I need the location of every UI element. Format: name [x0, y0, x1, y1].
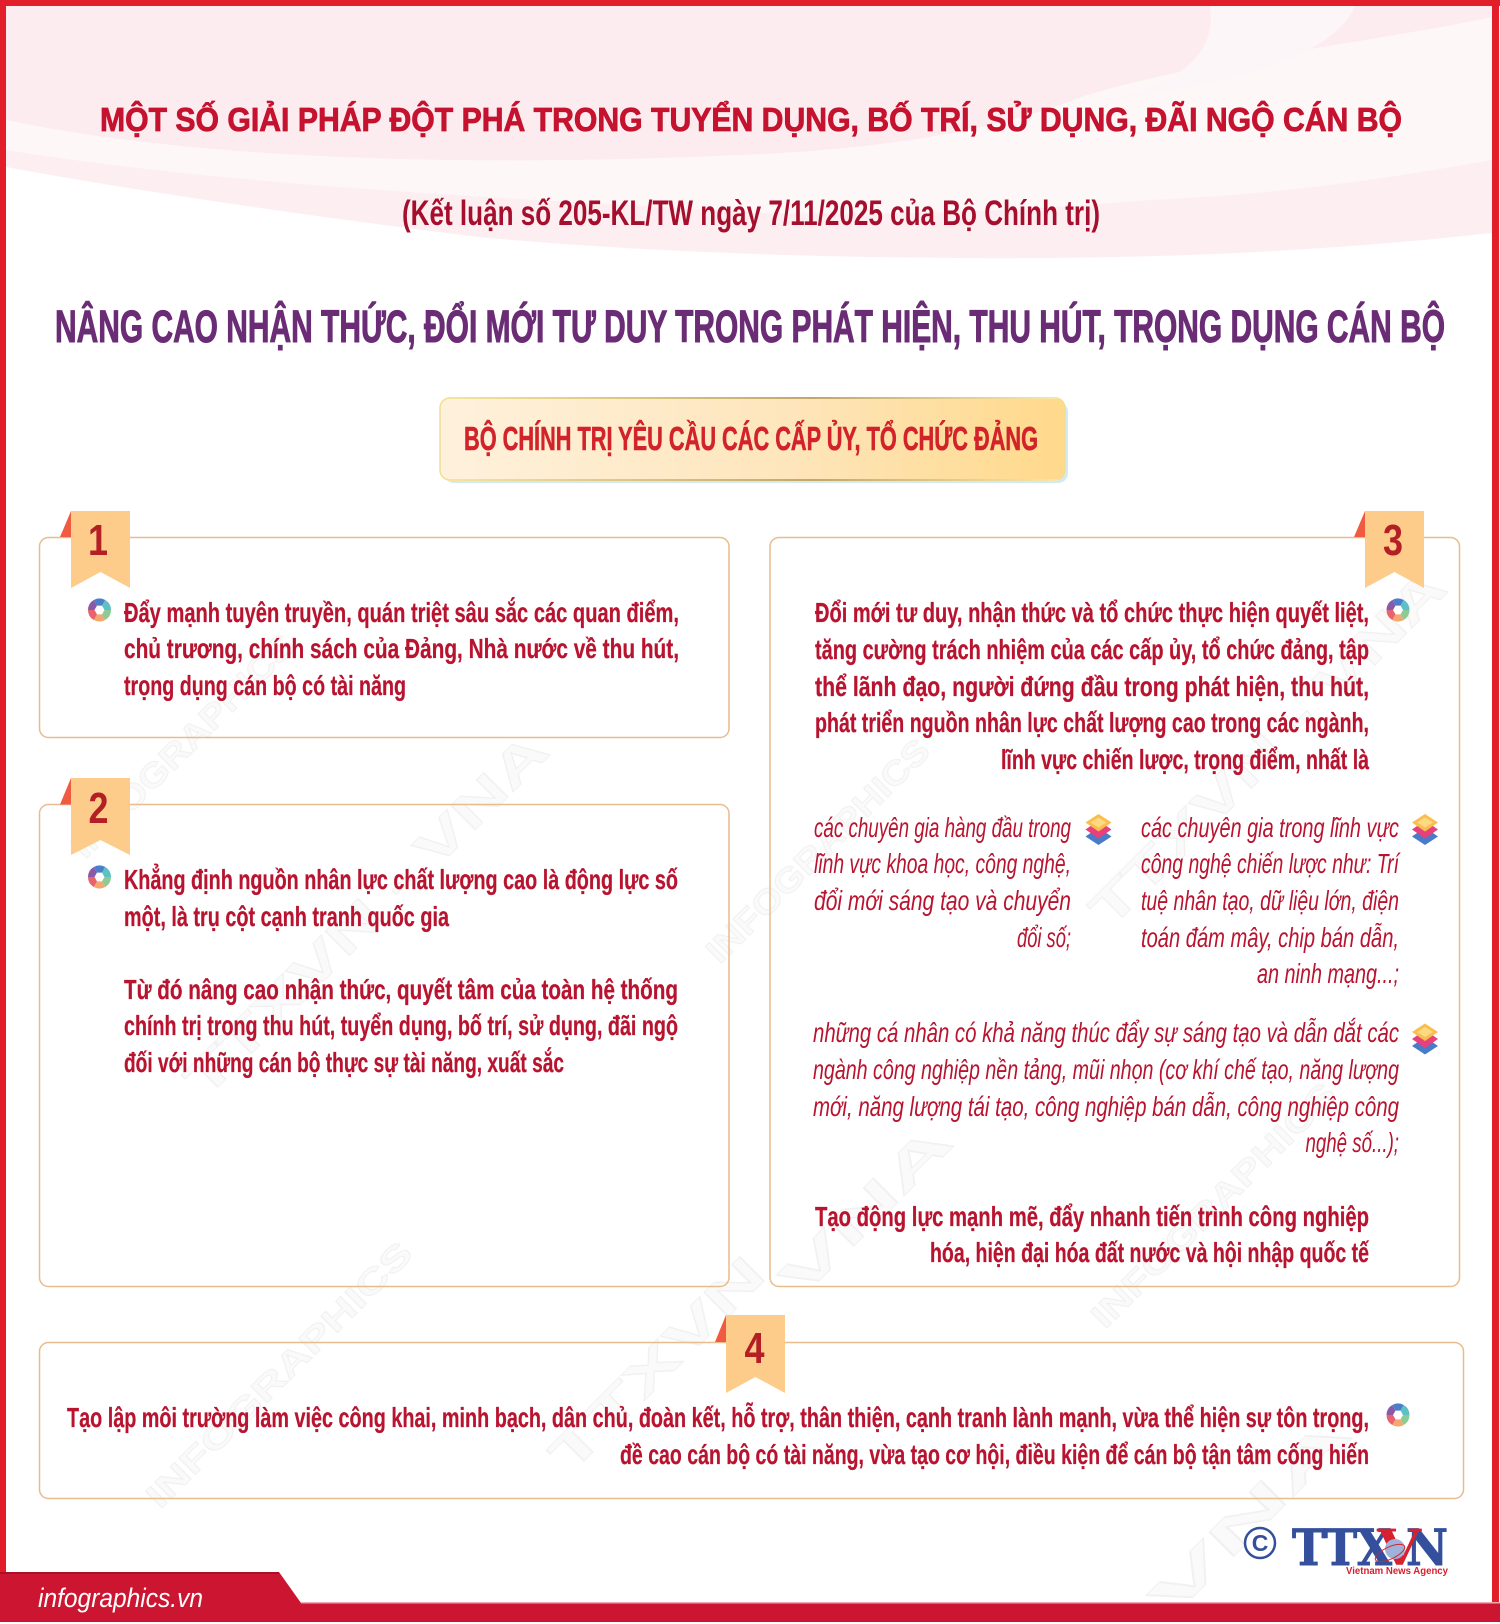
panel: card 2 — [40, 778, 729, 1286]
text: card 3 intro — [815, 597, 1369, 775]
icon: layers 1 — [1086, 814, 1112, 845]
text: experts column 1 — [814, 812, 1071, 953]
icon: aperture bullet — [1386, 1403, 1410, 1427]
text: experts column 2: an ninh mạng...; — [1257, 958, 1399, 989]
logo: TTXVN: Vietnam News Agency — [1346, 1566, 1448, 1577]
ribbon 4 — [715, 1315, 785, 1393]
text: individuals paragraph: nghệ số...); — [1306, 1127, 1399, 1158]
text: card 1 body: trọng dụng cán bộ có tài năng — [124, 670, 406, 701]
ribbon 1: 1 — [88, 516, 108, 565]
icon: copyright mark: C — [1252, 1530, 1268, 1556]
header background swoosh — [6, 6, 1492, 258]
ribbon 4: 4 — [744, 1324, 765, 1373]
icon: aperture bullet — [88, 865, 111, 889]
ribbon 2 — [60, 778, 130, 855]
logo: TTXVN: V — [1376, 1518, 1422, 1577]
text: experts column 1: lĩnh vực khoa học, công nghệ, — [814, 848, 1071, 879]
ribbon 2: 2 — [88, 784, 108, 833]
text: INFOGRAPHICS — [139, 1234, 420, 1516]
text: card 2 body: một, là trụ cột cạnh tranh quốc gia — [124, 901, 449, 932]
text: experts column 2: toán đám mây, chip bán dẫn, — [1141, 922, 1399, 953]
text: INFOGRAPHICS — [64, 627, 303, 866]
text: experts column 2: các chuyên gia trong lĩnh vực — [1141, 812, 1399, 843]
ribbon 1 — [60, 511, 130, 588]
text: INFOGRAPHICS — [1084, 1075, 1344, 1336]
ribbon 3: 3 — [1383, 516, 1403, 565]
icon: copyright mark — [1245, 1528, 1275, 1558]
icon: aperture bullet — [88, 598, 111, 622]
text: card 3 closing — [815, 1201, 1369, 1268]
text: VNA — [768, 1113, 963, 1308]
text: experts column 1: các chuyên gia hàng đầu trong — [814, 812, 1071, 843]
ribbon 3 — [1354, 511, 1424, 588]
text: card 2 body: đối với những cán bộ thực sự tài năng, xuất sắc — [124, 1047, 564, 1078]
text: INFOGRAPHICS — [699, 732, 938, 971]
text: TTXVN - VNA — [1078, 559, 1457, 938]
text: card 2 body: chính trị trong thu hút, tuyển dụng, bố trí, sử dụng, đãi ngộ — [124, 1010, 678, 1041]
text: card 2 body: Khẳng định nguồn nhân lực chất lượng cao là động lực số — [124, 863, 678, 895]
panel: card 1 — [40, 511, 729, 738]
text: card 2 body — [124, 863, 678, 1078]
panel: card 3 — [770, 511, 1460, 1286]
text: TTXVN — [538, 1245, 776, 1483]
icon: aperture bullet — [1386, 598, 1410, 622]
text: TTXVN - VNA — [173, 722, 559, 1108]
text: card 4 body — [67, 1402, 1369, 1470]
banner: requirement: BỘ CHÍNH TRỊ YÊU CẦU CÁC CẤP ỦY, TỔ CHỨC ĐẢNG — [464, 419, 1038, 457]
text: experts column 1: đổi số; — [1017, 922, 1071, 953]
logo: TTXVN: TTX — [1292, 1518, 1392, 1577]
text: individuals paragraph — [813, 1017, 1399, 1158]
icon: layers 2 — [1412, 814, 1438, 845]
panel: card 4 — [40, 1315, 1464, 1498]
text: experts column 1: đổi mới sáng tạo và chuyển — [814, 885, 1071, 916]
text: card 1 body — [124, 597, 679, 701]
title: MỘT SỐ GIẢI PHÁP ĐỘT PHÁ TRONG TUYỂN DỤNG, BỐ TRÍ, SỬ DỤNG, ĐÃI NGỘ CÁN BỘ — [100, 100, 1402, 138]
text: website: infographics.vn — [38, 1583, 203, 1613]
text: card 1 body: chủ trương, chính sách của Đảng, Nhà nước về thu hút, — [124, 633, 679, 664]
logo: TTXVN: N — [1406, 1518, 1448, 1577]
text: experts column 2 — [1141, 812, 1401, 989]
text: card 2 body: Từ đó nâng cao nhận thức, quyết tâm của toàn hệ thống — [124, 974, 678, 1005]
icon: layers 3 — [1412, 1024, 1438, 1054]
banner: requirement — [440, 397, 1068, 483]
footer bar — [0, 1572, 1500, 1622]
text: card 1 body: Đẩy mạnh tuyên truyền, quán triệt sâu sắc các quan điểm, — [124, 597, 679, 628]
subtitle: (Kết luận số 205-KL/TW ngày 7/11/2025 của Bộ Chính trị) — [402, 194, 1100, 233]
